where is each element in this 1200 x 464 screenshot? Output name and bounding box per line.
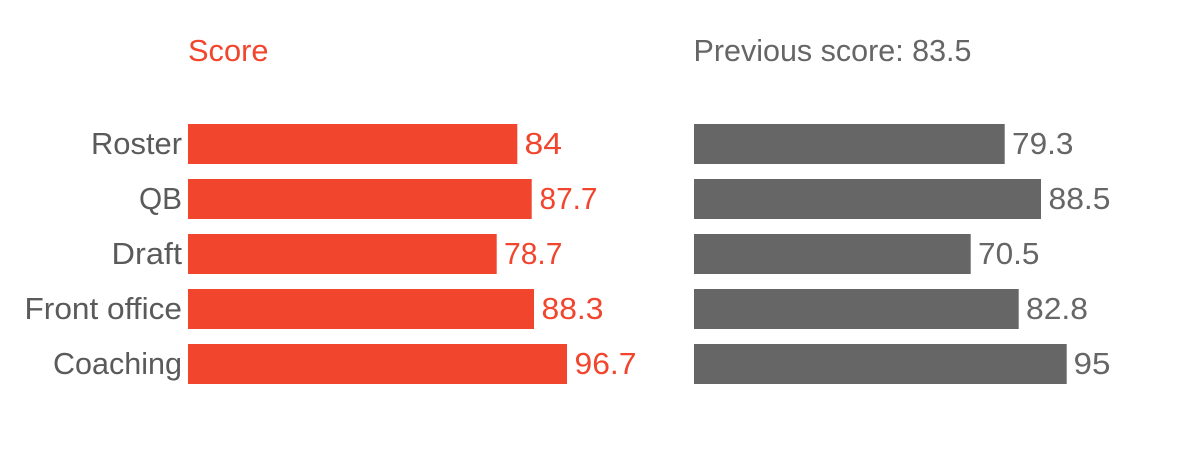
previous score values — [978, 126, 1110, 381]
row labels — [24, 126, 182, 381]
previous score values: 70.5 — [978, 236, 1040, 271]
row labels: Roster — [91, 126, 182, 161]
score values — [504, 126, 636, 381]
score values: 88.3 — [542, 291, 604, 326]
row labels: Draft — [112, 236, 182, 271]
row labels: Coaching — [53, 346, 182, 381]
score values: 84 — [524, 126, 562, 161]
previous score values: 79.3 — [1012, 126, 1074, 161]
score values: 87.7 — [540, 181, 598, 216]
panel: score — [24, 33, 636, 384]
heading: previous score: Previous score: 83.5 — [694, 33, 972, 68]
panel: previous score — [694, 33, 1110, 384]
row labels: Front office — [24, 291, 182, 326]
previous score values: 88.5 — [1048, 181, 1110, 216]
previous score values: 82.8 — [1026, 291, 1088, 326]
row labels: QB — [139, 181, 182, 216]
score values: 78.7 — [504, 236, 562, 271]
previous score bars — [694, 124, 1067, 384]
heading: score: Score — [188, 33, 268, 68]
previous score values: 95 — [1074, 346, 1110, 381]
score values: 96.7 — [574, 346, 636, 381]
score bars — [188, 124, 567, 384]
